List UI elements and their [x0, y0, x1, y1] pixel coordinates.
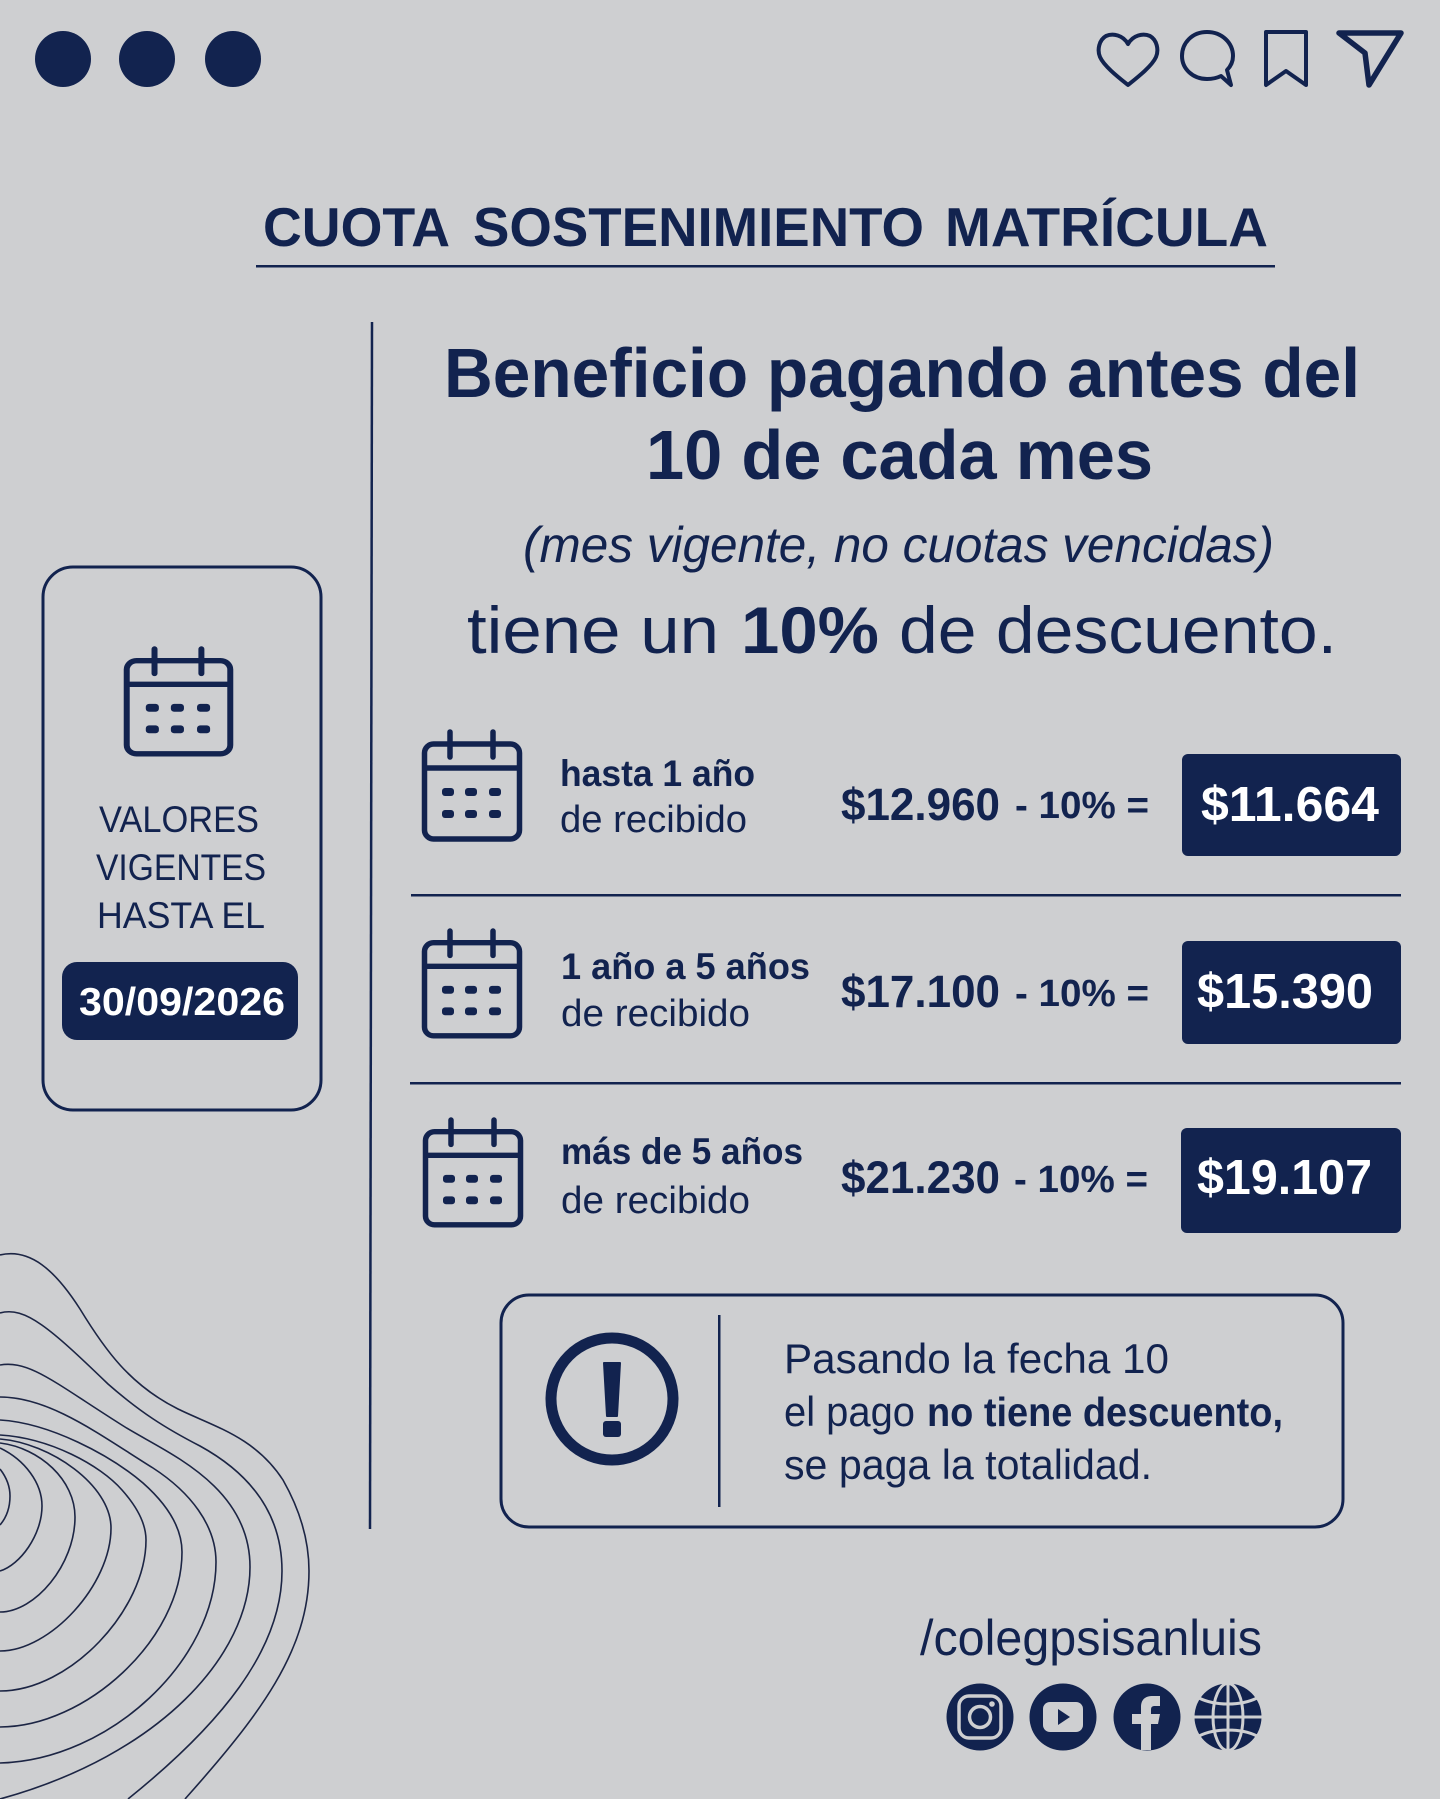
price calculation: $17.100	[841, 966, 1000, 1017]
label: de recibido	[560, 799, 747, 841]
icon: youtube	[1030, 1684, 1096, 1750]
discount statement	[467, 593, 1337, 667]
price calculation: - 10% =	[1015, 973, 1149, 1015]
icon: speech bubble	[1182, 32, 1233, 85]
decorative contour lines	[0, 1254, 309, 1799]
warning text: el pago	[784, 1388, 915, 1435]
warning text: no tiene descuento,	[927, 1389, 1283, 1435]
headline	[444, 334, 1360, 494]
label: más de 5 años	[561, 1131, 803, 1172]
final price	[1181, 1128, 1401, 1233]
icon: calendar	[426, 1120, 520, 1225]
final price: $19.107	[1197, 1151, 1372, 1205]
final price: $11.664	[1201, 778, 1379, 832]
price calculation: $12.960	[841, 779, 1000, 830]
label	[560, 753, 755, 841]
validity text: VIGENTES	[96, 847, 266, 888]
final price	[1182, 941, 1401, 1044]
label: de recibido	[561, 993, 750, 1035]
price calculation: - 10% =	[1014, 1159, 1148, 1201]
price calculation: - 10% =	[1015, 785, 1149, 827]
icon: calendar	[424, 732, 520, 839]
vertical divider	[370, 322, 372, 1529]
discount statement: 10%	[741, 593, 879, 667]
final price: $15.390	[1197, 965, 1373, 1019]
price calculation	[841, 966, 1149, 1017]
row: hasta 1 año	[424, 732, 1401, 856]
icon: send arrow	[1339, 33, 1401, 85]
label	[561, 946, 810, 1035]
title: CUOTA	[263, 196, 450, 258]
window dots	[35, 31, 261, 87]
title: MATRÍCULA	[945, 196, 1268, 258]
icon: calendar large	[127, 649, 230, 754]
social handle: /colegpsisanluis	[920, 1610, 1262, 1666]
social icons	[946, 1683, 1262, 1751]
warning text: se paga la totalidad.	[784, 1441, 1152, 1488]
final price	[1182, 754, 1401, 856]
validity text: VALORES	[99, 799, 259, 840]
icon: exclamation	[551, 1338, 673, 1460]
row: 1 año a 5 años	[424, 931, 1401, 1044]
validity text	[96, 799, 266, 936]
panel: warning	[501, 1295, 1343, 1527]
label: hasta 1 año	[560, 753, 755, 794]
headline: Beneficio pagando antes del	[444, 334, 1360, 412]
icon: instagram	[946, 1684, 1014, 1750]
label: 1 año a 5 años	[561, 946, 810, 987]
date badge	[62, 962, 298, 1040]
icon: bookmark	[1266, 32, 1306, 85]
warning text: Pasando la fecha 10	[784, 1335, 1169, 1382]
title	[256, 196, 1275, 268]
subheading: (mes vigente, no cuotas vencidas)	[523, 517, 1274, 573]
validity text: HASTA EL	[97, 895, 265, 936]
label	[561, 1131, 803, 1222]
warning text	[784, 1335, 1283, 1488]
discount statement: tiene un	[467, 593, 719, 667]
panel: validity card	[43, 567, 321, 1110]
headline: 10 de cada mes	[646, 416, 1153, 494]
price calculation	[841, 779, 1149, 830]
icon: globe	[1194, 1683, 1262, 1751]
title: SOSTENIMIENTO	[473, 196, 924, 258]
price calculation	[841, 1152, 1148, 1203]
price calculation: $21.230	[841, 1152, 1000, 1203]
label: de recibido	[561, 1180, 750, 1222]
icon: calendar	[424, 931, 520, 1036]
social action icons	[1099, 32, 1401, 85]
icon: facebook	[1114, 1684, 1180, 1750]
discount statement: de descuento.	[899, 593, 1337, 667]
date badge: 30/09/2026	[79, 981, 285, 1024]
row: más de 5 años	[426, 1120, 1401, 1233]
icon: heart	[1099, 35, 1157, 85]
